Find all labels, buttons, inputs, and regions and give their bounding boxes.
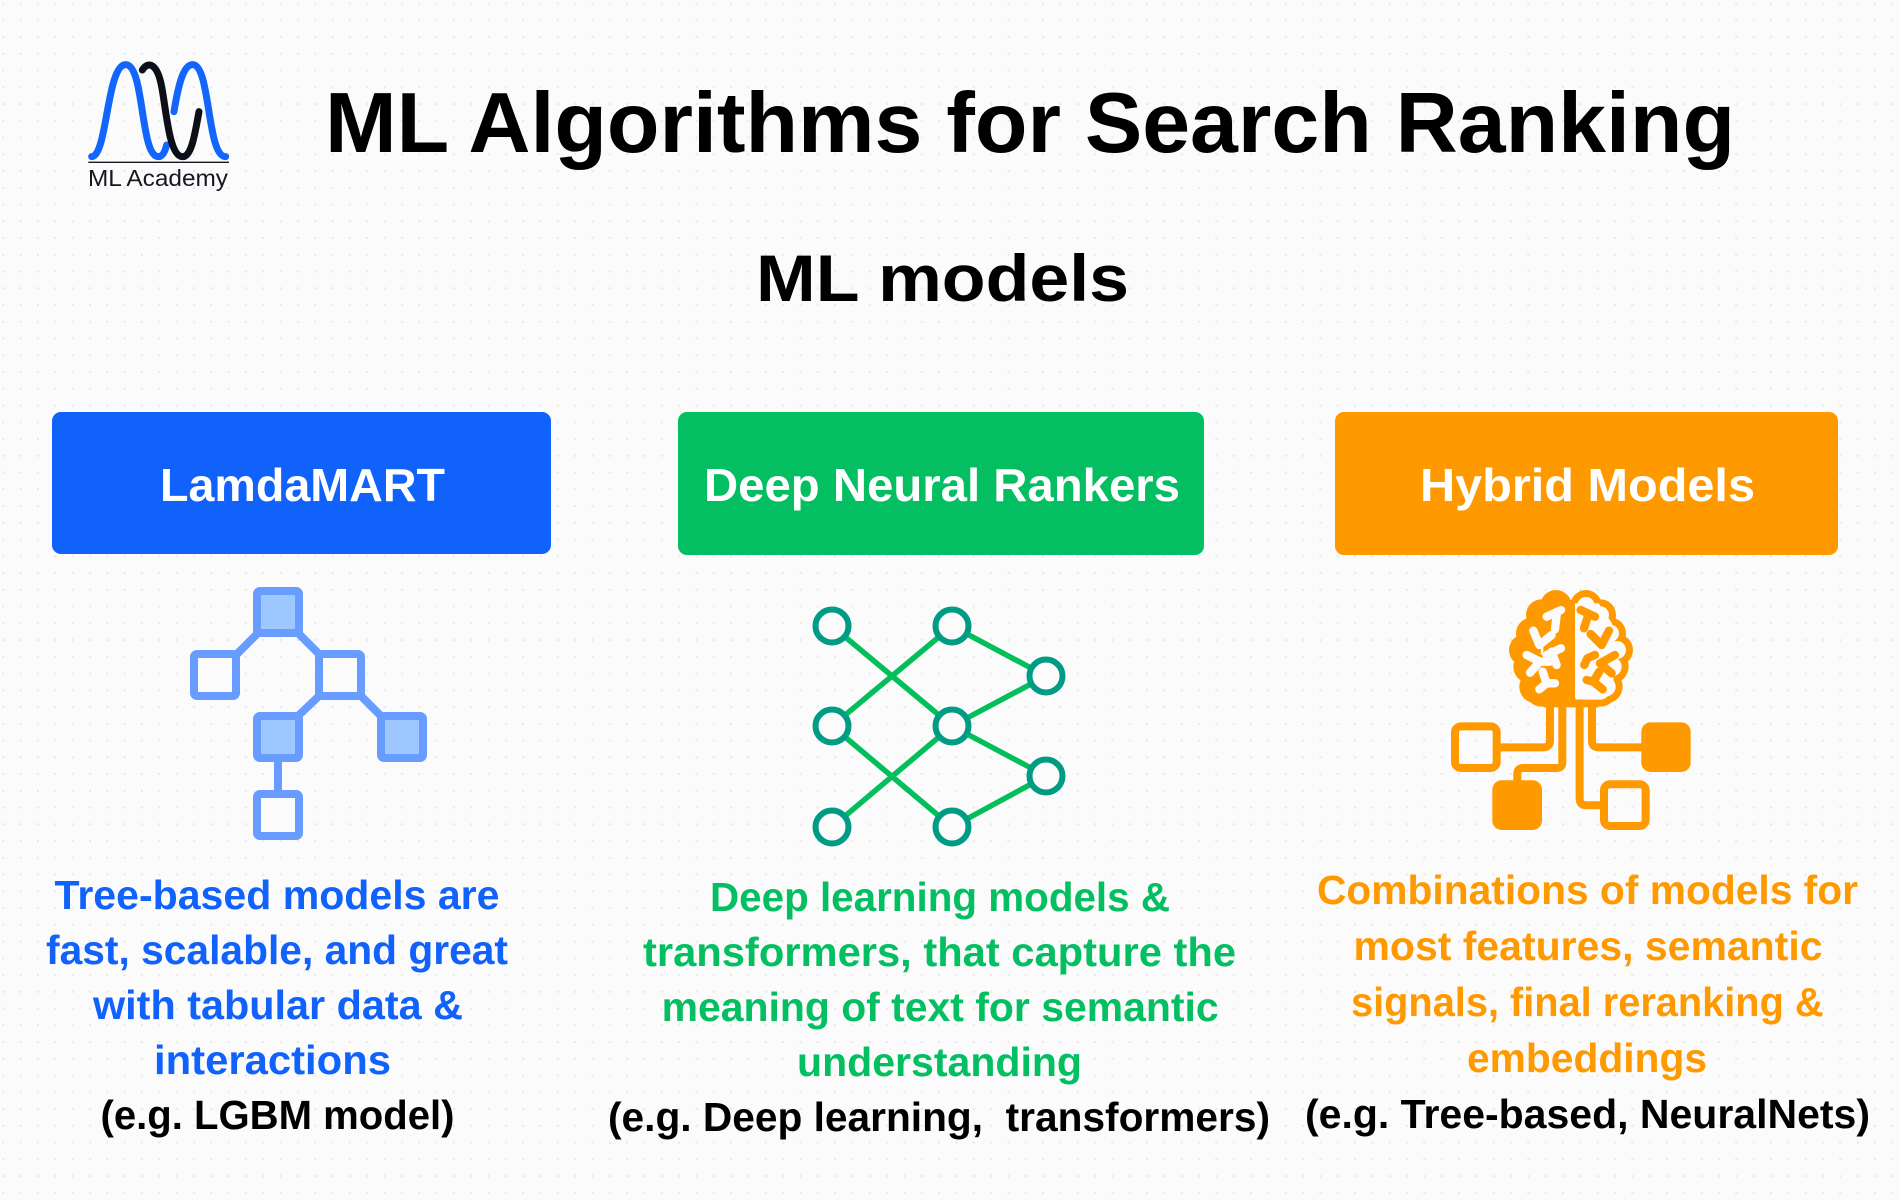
description: Deep Neural Rankers: transformers, that capture the — [643, 929, 1236, 975]
description: Hybrid Models: (e.g. Tree-based, NeuralNets) — [1305, 1091, 1870, 1137]
header box: Deep Neural Rankers: Deep Neural Rankers — [704, 459, 1180, 511]
description: LamdaMART: fast, scalable, and great — [46, 927, 508, 973]
description: LamdaMART — [46, 872, 508, 1138]
icon: decision tree — [194, 591, 423, 836]
description: Deep Neural Rankers: (e.g. Deep learning, transformers) — [608, 1094, 1270, 1140]
description: Hybrid Models: signals, final reranking & — [1351, 979, 1824, 1025]
description: Hybrid Models: most features, semantic — [1354, 923, 1822, 969]
panel: LamdaMART — [46, 412, 551, 1138]
description: Deep Neural Rankers — [608, 874, 1270, 1140]
description: Deep Neural Rankers: Deep learning models & — [710, 874, 1170, 920]
header box: LamdaMART: LamdaMART — [160, 459, 445, 511]
title: ML Algorithms for Search Ranking — [325, 76, 1735, 171]
header box: Hybrid Models: Hybrid Models — [1420, 459, 1755, 511]
subtitle: ML models: ML models — [756, 241, 1129, 315]
description: Hybrid Models: Combinations of models for — [1317, 867, 1858, 913]
description: LamdaMART: interactions — [154, 1037, 391, 1083]
description: Hybrid Models: embeddings — [1467, 1035, 1707, 1081]
panel: Hybrid Models — [1305, 412, 1870, 1137]
description: Deep Neural Rankers: meaning of text for semantic — [662, 984, 1219, 1030]
logo: ML Academy — [88, 65, 229, 191]
icon: brain with connected nodes — [1455, 590, 1691, 830]
header box: Deep Neural Rankers — [678, 412, 1204, 555]
icon: neural network — [816, 610, 1062, 844]
logo: ML Academy: ML Academy — [88, 165, 229, 191]
header box: Hybrid Models — [1335, 412, 1838, 555]
header box: LamdaMART — [52, 412, 551, 554]
panel: Deep Neural Rankers — [608, 412, 1270, 1140]
description: Deep Neural Rankers: understanding — [797, 1039, 1082, 1085]
description: LamdaMART: with tabular data & — [92, 982, 463, 1028]
description: Hybrid Models — [1305, 867, 1870, 1137]
description: LamdaMART: (e.g. LGBM model) — [100, 1092, 454, 1138]
description: LamdaMART: Tree-based models are — [54, 872, 499, 918]
